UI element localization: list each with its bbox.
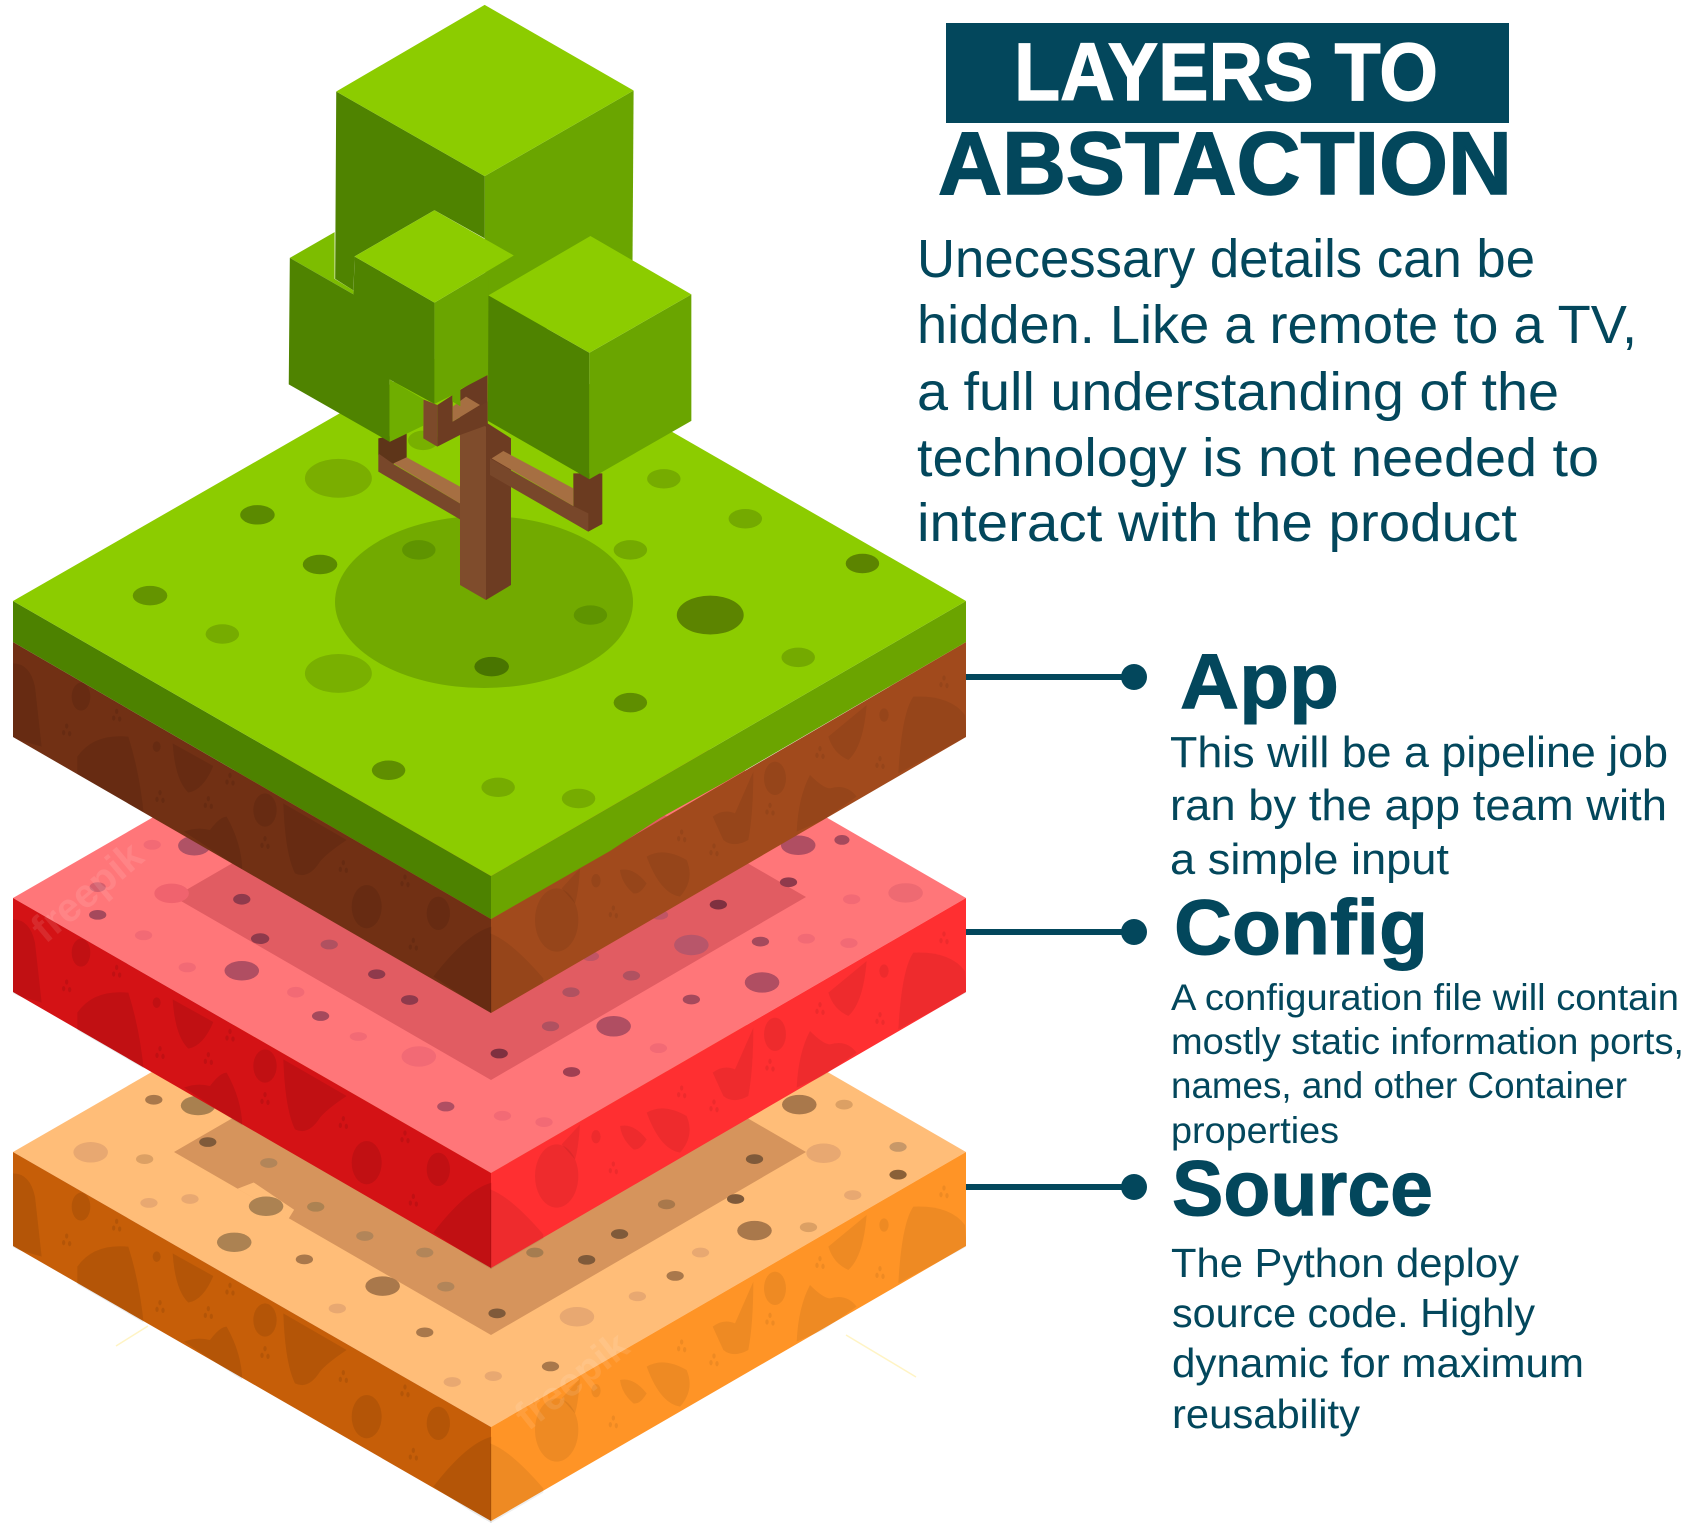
text: source description: The Python deploy bbox=[1171, 1240, 1519, 1286]
big canopy cube bbox=[335, 5, 634, 375]
text: config description bbox=[1171, 977, 1684, 1151]
title banner: LAYERS TO bbox=[1014, 27, 1438, 118]
text: source description bbox=[1171, 1240, 1584, 1437]
text: app description: This will be a pipeline job bbox=[1170, 728, 1668, 777]
text: source description: reusability bbox=[1172, 1391, 1360, 1437]
text: app description: a simple input bbox=[1170, 835, 1449, 884]
heading: app: App bbox=[1180, 637, 1339, 725]
right canopy cube bbox=[488, 236, 691, 479]
text: source description: source code. Highly bbox=[1172, 1290, 1535, 1336]
intro paragraph: a full understanding of the bbox=[917, 362, 1559, 422]
text: config description: names, and other Container bbox=[1171, 1065, 1627, 1106]
layer: app (grass and dirt slab) bbox=[13, 327, 967, 1017]
intro paragraph: hidden. Like a remote to a TV, bbox=[917, 295, 1637, 355]
text: app description bbox=[1170, 728, 1668, 884]
text: source description: dynamic for maximum bbox=[1172, 1340, 1584, 1386]
grass top surface bbox=[13, 327, 966, 876]
layer: source (orange slab) bbox=[13, 877, 967, 1526]
heading: config: Config bbox=[1174, 883, 1428, 971]
text: config description: A configuration file will contain bbox=[1171, 977, 1679, 1018]
intro paragraph: technology is not needed to bbox=[917, 428, 1599, 488]
left canopy cube bbox=[289, 210, 514, 442]
intro paragraph: interact with the product bbox=[917, 493, 1517, 553]
layer: source (orange slab): freepik bbox=[507, 1323, 638, 1439]
tree shadow bbox=[335, 516, 633, 688]
grass spots bbox=[133, 431, 879, 808]
connector: source bbox=[966, 1174, 1147, 1200]
heading: source: Source bbox=[1172, 1144, 1433, 1232]
tree trunk and branches bbox=[378, 373, 602, 600]
layer: config (red slab) bbox=[13, 623, 967, 1273]
faint background lines bbox=[116, 1326, 916, 1377]
connector: config bbox=[966, 919, 1147, 945]
text: app description: ran by the app team with bbox=[1170, 781, 1667, 830]
icon: isometric tree bbox=[289, 5, 691, 600]
connector: app bbox=[966, 664, 1147, 690]
intro paragraph: Unecessary details can be bbox=[917, 229, 1535, 289]
intro paragraph bbox=[917, 229, 1637, 553]
text: config description: mostly static information ports, bbox=[1171, 1021, 1684, 1062]
layer: config (red slab): freepik bbox=[23, 833, 152, 951]
text: config description: properties bbox=[1171, 1110, 1339, 1151]
title second line: ABSTACTION bbox=[938, 113, 1512, 213]
